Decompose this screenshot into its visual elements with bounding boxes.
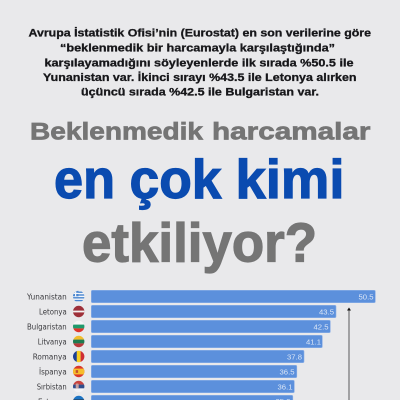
- country labels: İspanya: [39, 367, 67, 376]
- icon: flag of Bulgaria: [73, 320, 85, 333]
- bar values: 37.8: [287, 352, 302, 361]
- intro text block: Yunanistan var. İkinci sırayı %43.5 ile Letonya alırken: [43, 71, 357, 84]
- arrow: [347, 308, 351, 400]
- intro text block: üçüncü sırada %42.5 ile Bulgaristan var.: [81, 86, 319, 98]
- intro text block: “beklenmedik bir harcamayla karşılaştığında”: [60, 42, 335, 54]
- country labels: Sırbistan: [37, 382, 67, 391]
- bar values: 43.5: [319, 307, 334, 316]
- bar values: 50.5: [359, 292, 374, 301]
- intro text block: Avrupa İstatistik Ofisi’nin (Eurostat) en son verilerine göre: [28, 26, 371, 40]
- country labels: Bulgaristan: [27, 322, 67, 331]
- bar values: 42.5: [314, 322, 328, 331]
- icon: flag of Spain: [73, 366, 85, 378]
- icon: flag of Lithuania: [73, 336, 85, 348]
- country labels: Romanya: [33, 352, 67, 361]
- bar values: 41.1: [306, 337, 321, 346]
- icon: flag of Latvia: [73, 306, 85, 318]
- bar chart: [26, 290, 375, 400]
- country labels: [26, 292, 67, 400]
- title: [30, 118, 371, 274]
- title: kimi: [236, 148, 344, 210]
- intro text block: [28, 26, 371, 98]
- title: çok: [130, 148, 222, 210]
- icon: flag of Serbia: [73, 380, 85, 393]
- bar values: 36.5: [280, 367, 294, 376]
- icon: flag of Romania: [73, 350, 85, 362]
- bars: [91, 290, 375, 400]
- country labels: Yunanistan: [26, 292, 67, 301]
- title: etkiliyor?: [82, 212, 317, 274]
- title: Beklenmedik: [30, 118, 203, 146]
- country labels: Litvanya: [38, 337, 67, 346]
- bar values: [276, 292, 374, 400]
- title: en: [54, 148, 115, 210]
- icon: flag of Estonia: [73, 396, 85, 400]
- icon: flag of Greece: [73, 290, 85, 302]
- bar values: 36.1: [278, 382, 292, 391]
- intro text block: karşılayamadığını söyleyenlerde ilk sırada %50.5 ile: [44, 58, 354, 70]
- country labels: Letonya: [39, 307, 67, 316]
- title: harcamalar: [212, 118, 371, 146]
